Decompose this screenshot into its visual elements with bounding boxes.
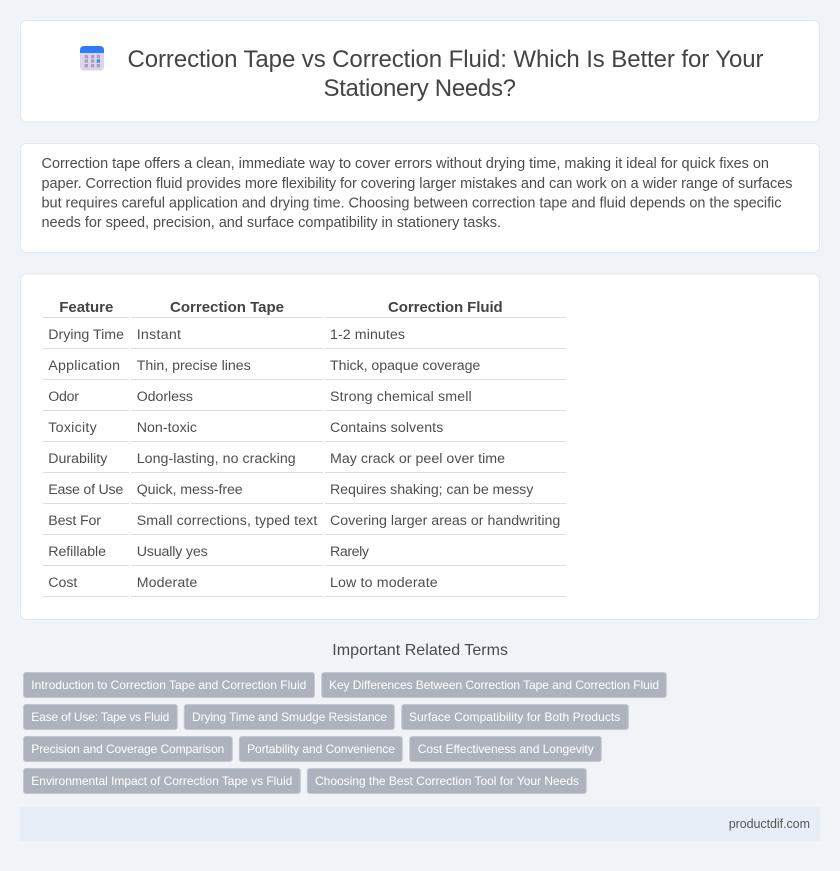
table row: Best For: Covering larger areas or handwriting [330, 513, 560, 529]
table row: Cost [43, 575, 566, 597]
icon: calendar [80, 46, 104, 70]
table row: Toxicity [43, 420, 566, 442]
table row: Odor: Strong chemical smell [330, 389, 472, 405]
title: Stationery Needs? [324, 75, 516, 102]
table row: Durability [43, 451, 566, 473]
table row: Odor [43, 389, 566, 411]
tag: precision [24, 736, 232, 762]
title: Correction Tape vs Correction Fluid: Which Is Better for Your [128, 46, 764, 73]
header panel [20, 20, 820, 122]
table row: Odor: Odor [48, 389, 79, 405]
table row: Ease of Use [43, 482, 566, 504]
table row: Refillable: Rarely [330, 544, 370, 560]
table row: Ease of Use: Requires shaking; can be messy [330, 482, 534, 498]
table row: Drying Time: Drying Time [48, 327, 124, 343]
table row: Application: Thick, opaque coverage [330, 358, 480, 374]
tag: cost effectiveness: Cost Effectiveness and Longevity [418, 742, 594, 756]
tag: cost effectiveness [410, 736, 601, 762]
tag: precision: Precision and Coverage Comparison [31, 742, 224, 756]
tag: portability: Portability and Convenience [247, 742, 395, 756]
table row: Toxicity: Non-toxic [137, 420, 197, 436]
table row: Drying Time [43, 327, 566, 349]
table row: Ease of Use: Quick, mess-free [137, 482, 243, 498]
table header: Correction Tape [170, 299, 284, 316]
tag: drying time: Drying Time and Smudge Resistance [192, 710, 387, 724]
panel: summary paragraph: Correction tape offers a clean, immediate way to cover errors without drying time, making it ideal for quick fixes on [42, 156, 769, 172]
tag: environmental impact: Environmental Impact of Correction Tape vs Fluid [31, 774, 292, 788]
tag: choosing the best: Choosing the Best Correction Tool for Your Needs [315, 774, 579, 788]
table header: Feature [59, 299, 113, 316]
table row: Durability: Long-lasting, no cracking [137, 451, 296, 467]
panel: summary paragraph: paper. Correction fluid provides more flexibility for covering larger mistakes and can work on a wider range of surfaces [42, 176, 792, 192]
table row: Application: Thin, precise lines [137, 358, 251, 374]
tag: drying time [184, 704, 394, 730]
panel: summary paragraph: but requires careful application and drying time. Choosing between correction tape and fluid depends on the specific [42, 196, 782, 212]
table row: Ease of Use: Ease of Use [48, 482, 123, 498]
tag: key differences [322, 672, 666, 698]
table row: Drying Time: 1-2 minutes [330, 327, 405, 343]
table row: Durability: Durability [48, 451, 108, 467]
table row: Application: Application [48, 358, 120, 374]
tag: introduction [24, 672, 314, 698]
tag: portability [239, 736, 402, 762]
tag: key differences: Key Differences Between Correction Tape and Correction Fluid [329, 678, 659, 692]
panel: summary paragraph [20, 144, 820, 252]
footer bar [20, 807, 820, 841]
table header: Correction Fluid [388, 299, 503, 316]
table row: Cost: Moderate [137, 575, 197, 591]
tag: surface compatibility: Surface Compatibility for Both Products [409, 710, 620, 724]
tag: introduction: Introduction to Correction Tape and Correction Fluid [31, 678, 306, 692]
table row: Refillable: Usually yes [137, 544, 208, 560]
title [128, 46, 764, 102]
panel: summary paragraph: needs for speed, precision, and surface compatibility in stationery tasks. [42, 215, 501, 231]
table row: Application [43, 358, 566, 380]
table header [43, 299, 566, 318]
table row: Cost: Cost [48, 575, 77, 591]
tag: ease of use: Ease of Use: Tape vs Fluid [31, 710, 169, 724]
table row: Best For: Best For [48, 513, 101, 529]
tag: choosing the best [307, 768, 586, 794]
table row: Best For: Small corrections, typed text [137, 513, 317, 529]
table row: Durability: May crack or peel over time [330, 451, 505, 467]
tag: environmental impact [24, 768, 300, 794]
tag: ease of use [24, 704, 177, 730]
table row: Cost: Low to moderate [330, 575, 438, 591]
table row: Refillable: Refillable [48, 544, 106, 560]
footer bar: productdif.com [729, 817, 810, 831]
table row: Refillable [43, 544, 566, 566]
table row: Odor: Odorless [137, 389, 193, 405]
table row: Toxicity: Contains solvents [330, 420, 443, 436]
table row: Best For [43, 513, 566, 535]
heading: related terms: Important Related Terms [332, 642, 508, 659]
tag: surface compatibility [402, 704, 628, 730]
table row: Toxicity: Toxicity [48, 420, 98, 436]
table row: Drying Time: Instant [137, 327, 181, 343]
panel: comparison table [20, 274, 820, 620]
